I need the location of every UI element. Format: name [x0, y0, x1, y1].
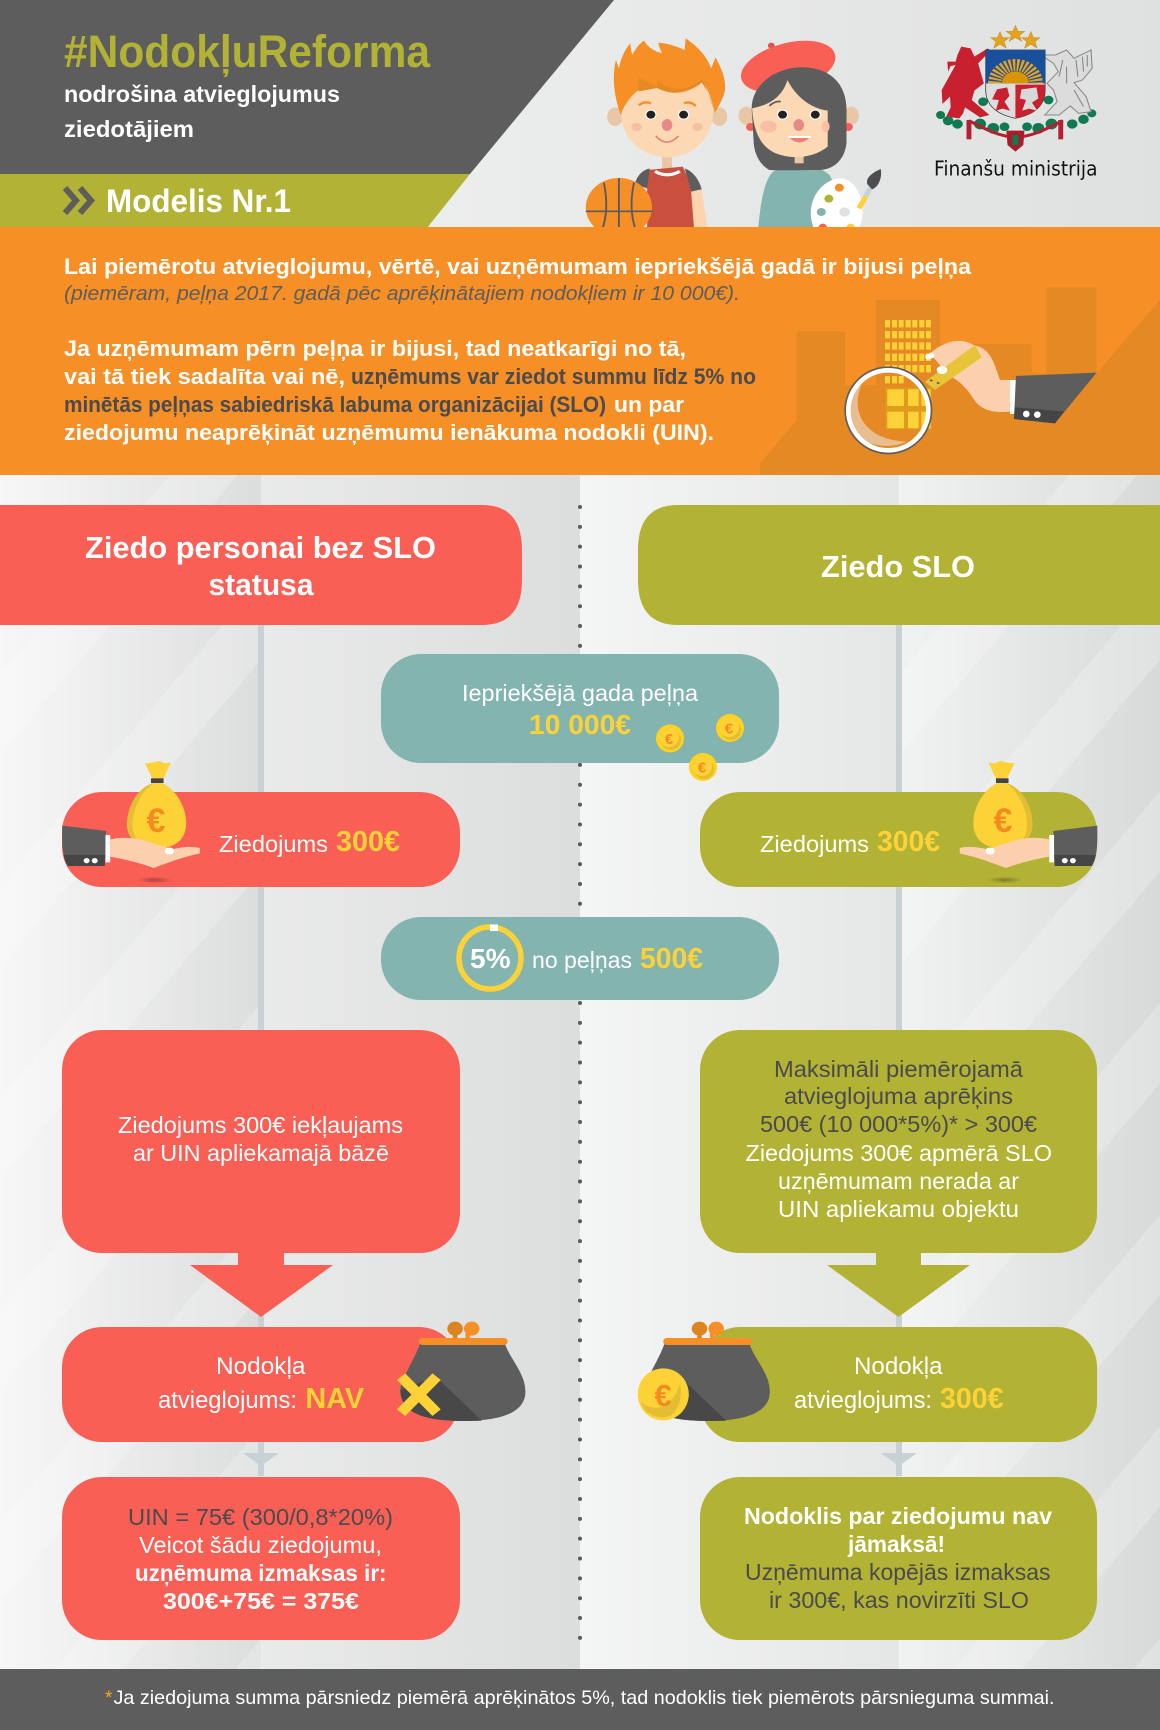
footer: Ja ziedojuma summa pārsniedz piemērā aprēķinātos 5%, tad nodoklis tiek piemērots pārsnieguma summai. [114, 1687, 1054, 1709]
box: tax relief none: atvieglojums: [158, 1387, 297, 1414]
intro text: ziedojumu neaprēķināt uzņēmumu ienākuma nodokli (UIN). [64, 420, 714, 445]
box: maximum relief calculation: 500€ (10 000*5%)* > 300€ [760, 1111, 1037, 1137]
header background [0, 0, 1160, 228]
box: donation included in taxable base: Ziedojums 300€ iekļaujams [118, 1112, 403, 1138]
heading: no SLO status [0, 505, 522, 625]
box: no tax payable: jāmaksā! [847, 1531, 945, 1557]
illustration: magnifier and hand [847, 341, 1097, 452]
box: tax relief none: Nodokļa [216, 1353, 306, 1380]
intro text: Lai piemērotu atvieglojumu, vērtē, vai uzņēmumam iepriekšējā gadā ir bijusi peļņa [64, 254, 972, 279]
box: five percent of profit: no peļņas [532, 947, 632, 973]
shield [986, 50, 1045, 118]
intro text: minētās peļņas sabiedriskā labuma organizācijai (SLO) [64, 392, 606, 417]
icon: euro coins: € [725, 720, 734, 738]
box: no tax payable: Uzņēmuma kopējās izmaksas [745, 1559, 1050, 1585]
intro text: vai tā tiek sadalīta vai nē, [64, 364, 345, 389]
box: donation left [62, 761, 460, 887]
illustration: girl with palette [734, 31, 881, 231]
footer: * [105, 1688, 113, 1709]
box: previous year profit: 10 000€ [529, 709, 631, 740]
box: cost calculation: Veicot šādu ziedojumu, [139, 1532, 382, 1558]
box: no tax payable: ir 300€, kas novirzīti SLO [769, 1587, 1029, 1613]
box: five percent of profit [381, 917, 779, 1000]
box: tax relief 300: 300€ [940, 1383, 1004, 1415]
illustration: buildings [760, 287, 1160, 475]
box: cost calculation [62, 1477, 460, 1640]
box: donation left: Ziedojums [219, 831, 328, 857]
icon: empty purse with cross [400, 1322, 525, 1421]
icon: euro coins [656, 714, 744, 781]
intro text: Ja uzņēmumam pērn peļņa ir bijusi, tad neatkarīgi no tā, [64, 336, 686, 361]
icon: purse with coin [638, 1322, 770, 1421]
box: maximum relief calculation: uzņēmumam nerada ar [778, 1168, 1019, 1194]
subtitle: nodrošina atvieglojumus [64, 81, 340, 107]
subtitle: ziedotājiem [64, 116, 194, 142]
panel: orange intro [0, 227, 1160, 475]
icon: percent ring [459, 924, 521, 989]
box: five percent of profit: 500€ [640, 943, 703, 975]
box: maximum relief calculation [700, 1030, 1097, 1253]
stars [991, 25, 1040, 48]
icon: euro coins: € [698, 760, 707, 776]
icon: double chevron [65, 188, 91, 213]
model band [0, 174, 470, 228]
title: #NodokļuReforma [64, 26, 431, 77]
box: donation right: 300€ [877, 826, 940, 858]
panel backgrounds [0, 475, 1160, 1669]
icon label: euro on bag: € [147, 802, 166, 840]
box: maximum relief calculation: atvieglojuma aprēķins [784, 1083, 1013, 1109]
box: donation left: 300€ [336, 826, 400, 858]
box: no tax payable: Nodoklis par ziedojumu nav [744, 1503, 1052, 1529]
box: no tax payable [700, 1477, 1097, 1640]
griffin [1041, 50, 1092, 115]
box: cost calculation: UIN = 75€ (300/0,8*20%) [128, 1504, 393, 1530]
box: tax relief none: NAV [306, 1383, 365, 1415]
intro text [64, 254, 972, 445]
arrow: right big [827, 1253, 970, 1317]
intro text: uzņēmums var ziedot summu līdz 5% no [351, 364, 756, 389]
illustration: boy with basketball [586, 38, 727, 237]
box: tax relief none [62, 1322, 525, 1442]
icon: money bag on hand [62, 761, 200, 883]
box: previous year profit [381, 654, 779, 763]
box: donation right: Ziedojums [760, 831, 869, 857]
icon label: euro on coin: € [654, 1378, 672, 1413]
intro text: un par [614, 392, 684, 417]
box: maximum relief calculation: Maksimāli piemērojamā [774, 1056, 1023, 1082]
icon label: euro on bag: € [994, 802, 1013, 840]
box: maximum relief calculation: Ziedojums 300€ apmērā SLO [746, 1140, 1052, 1166]
icon: percent ring: 5% [470, 943, 511, 974]
box: maximum relief calculation: UIN apliekamu objektu [778, 1196, 1019, 1222]
box: donation included in taxable base: ar UIN apliekamajā bāzē [133, 1140, 389, 1166]
box: tax relief 300 [638, 1322, 1097, 1442]
box: cost calculation: uzņēmuma izmaksas ir: [135, 1560, 386, 1586]
subtitle [64, 81, 340, 142]
box: previous year profit: Iepriekšējā gada peļņa [462, 680, 699, 706]
footer [0, 1669, 1160, 1730]
foliage and ribbon [936, 96, 1096, 152]
intro text: (piemēram, peļņa 2017. gadā pēc aprēķinātajiem nodokļiem ir 10 000€). [64, 282, 740, 305]
model band: Modelis Nr.1 [106, 183, 291, 219]
icon: euro coins: € [665, 731, 674, 748]
logo caption: Finanšu ministrija [934, 156, 1098, 180]
heading: SLO [638, 505, 1160, 625]
lion [942, 47, 991, 118]
header dark panel [0, 0, 614, 174]
icon: Latvian coat of arms [936, 25, 1096, 152]
box: donation right [700, 761, 1097, 887]
heading: SLO: Ziedo SLO [821, 549, 975, 584]
box: donation included in taxable base [62, 1030, 460, 1253]
box: cost calculation: 300€+75€ = 375€ [163, 1588, 359, 1614]
arrow: left small [243, 1453, 279, 1466]
heading: no SLO status: statusa [208, 567, 314, 602]
icon: money bag on hand [960, 761, 1097, 883]
flow connector right [896, 625, 902, 1476]
flow connector left [258, 625, 264, 1476]
arrow: right small [881, 1453, 917, 1466]
box: tax relief 300: Nodokļa [854, 1353, 943, 1380]
heading: no SLO status: Ziedo personai bez SLO [85, 530, 436, 565]
arrow: left big [190, 1253, 333, 1317]
box: tax relief 300: atvieglojums: [794, 1387, 932, 1414]
